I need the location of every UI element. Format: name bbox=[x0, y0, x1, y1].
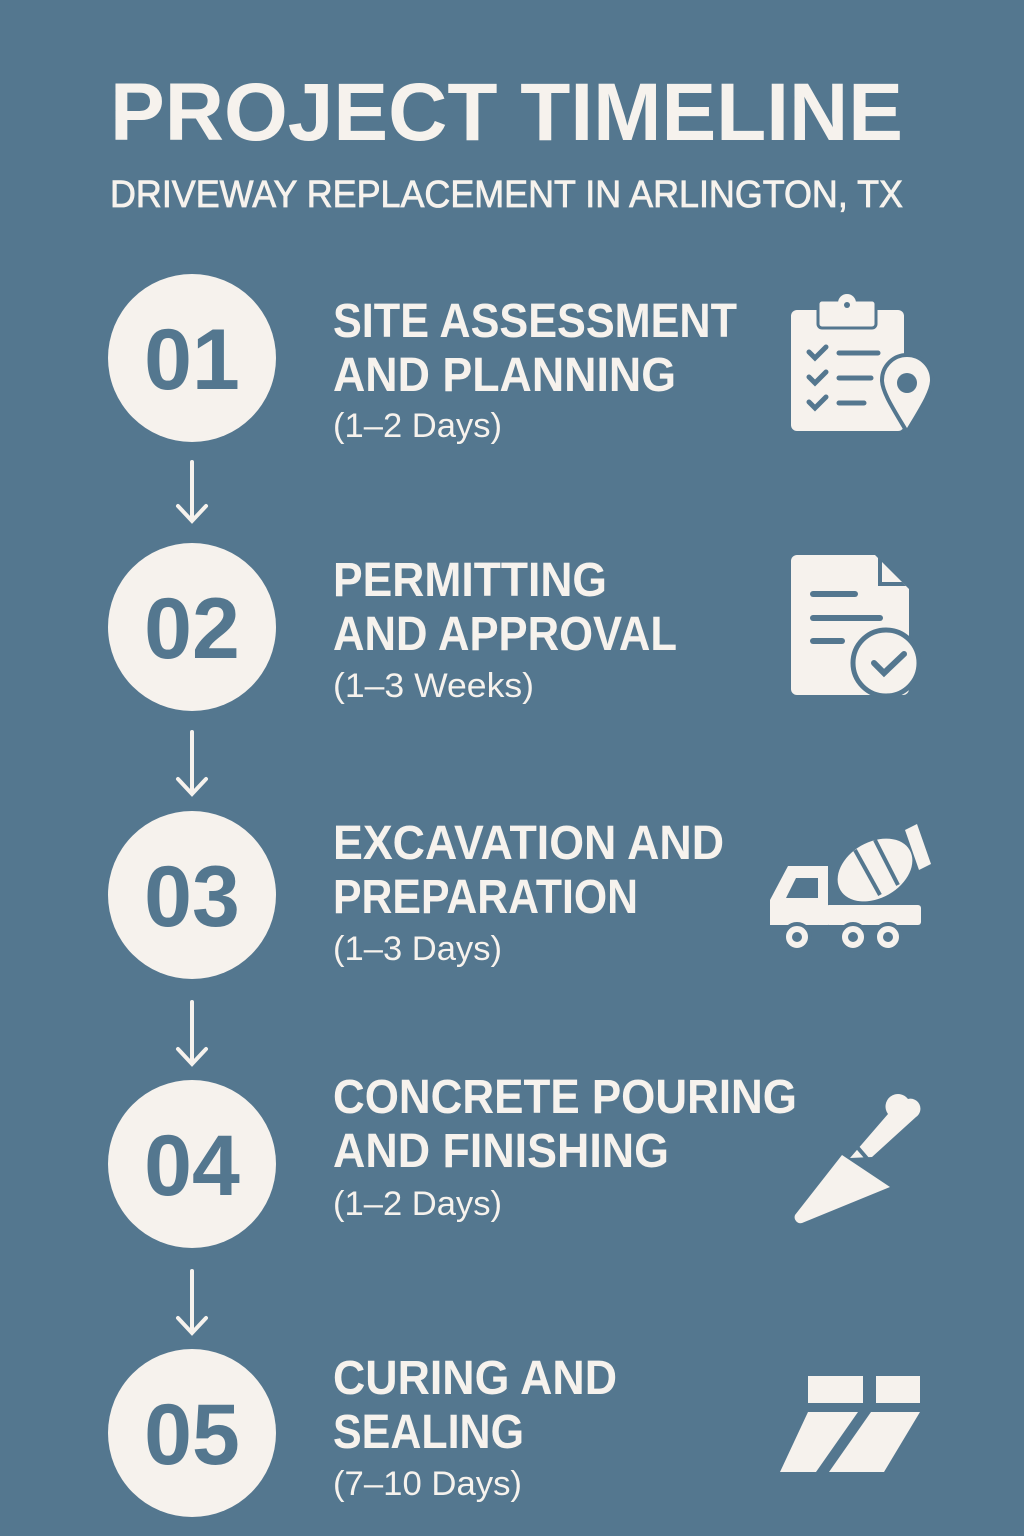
step 1 bbox=[108, 274, 932, 445]
circle 01: 01 bbox=[144, 312, 240, 408]
step 5 bbox=[108, 1349, 920, 1517]
circle 05: 05 bbox=[144, 1387, 240, 1483]
title: PROJECT TIMELINE bbox=[110, 67, 903, 158]
arrow 4 bbox=[178, 1271, 206, 1333]
arrow 2 bbox=[178, 732, 206, 794]
icon: paving slabs bbox=[780, 1376, 920, 1472]
heading 4 bbox=[333, 1071, 797, 1178]
icon: clipboard with pin bbox=[791, 294, 932, 432]
heading 1 bbox=[333, 295, 737, 402]
heading 4: AND FINISHING bbox=[333, 1125, 669, 1178]
heading 5: CURING AND bbox=[333, 1352, 617, 1405]
circle 03 bbox=[108, 811, 276, 979]
circle 02: 02 bbox=[144, 581, 240, 677]
heading 4: CONCRETE POURING bbox=[333, 1071, 797, 1124]
heading 5 bbox=[333, 1352, 617, 1459]
subtitle: DRIVEWAY REPLACEMENT IN ARLINGTON, TX bbox=[110, 174, 903, 216]
step 4 bbox=[108, 1071, 920, 1248]
icon: document with check bbox=[791, 555, 919, 696]
step 3 bbox=[108, 811, 931, 979]
circle 03: 03 bbox=[144, 849, 240, 945]
duration 3: (1–3 Days) bbox=[333, 930, 502, 968]
circle 01 bbox=[108, 274, 276, 442]
circle 05 bbox=[108, 1349, 276, 1517]
circle 04 bbox=[108, 1080, 276, 1248]
arrow 1 bbox=[178, 462, 206, 521]
icon: trowel bbox=[795, 1094, 920, 1223]
step 2 bbox=[108, 543, 919, 711]
heading 2 bbox=[333, 554, 677, 661]
arrow 3 bbox=[178, 1002, 206, 1064]
duration 4: (1–2 Days) bbox=[333, 1185, 502, 1223]
heading 2: AND APPROVAL bbox=[333, 608, 677, 661]
circle 02 bbox=[108, 543, 276, 711]
heading 3: EXCAVATION AND bbox=[333, 817, 724, 870]
heading 3: PREPARATION bbox=[333, 871, 638, 924]
heading 5: SEALING bbox=[333, 1406, 524, 1459]
duration 1: (1–2 Days) bbox=[333, 407, 502, 445]
heading 1: AND PLANNING bbox=[333, 349, 676, 402]
heading 3 bbox=[333, 817, 724, 924]
heading 2: PERMITTING bbox=[333, 554, 607, 607]
icon: concrete mixer truck bbox=[770, 824, 931, 950]
heading 1: SITE ASSESSMENT bbox=[333, 295, 737, 348]
circle 04: 04 bbox=[144, 1118, 240, 1214]
duration 2: (1–3 Weeks) bbox=[333, 667, 534, 705]
duration 5: (7–10 Days) bbox=[333, 1465, 522, 1503]
